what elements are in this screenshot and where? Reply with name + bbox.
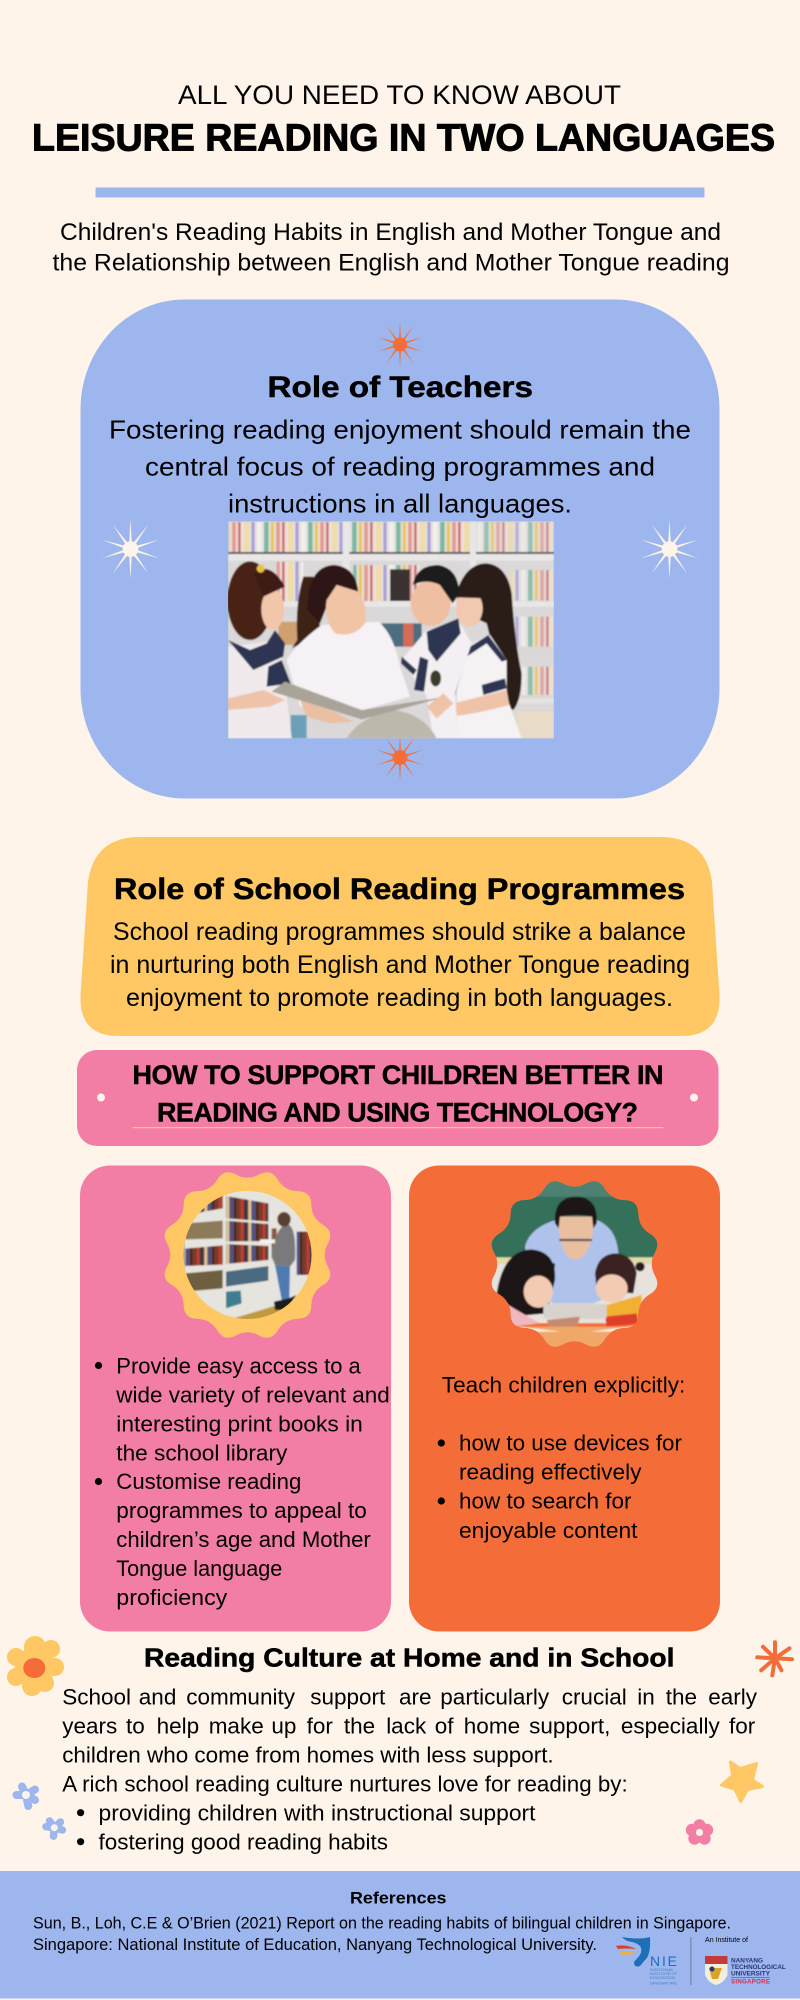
boy body xyxy=(402,623,472,738)
books top row xyxy=(229,522,343,552)
panel: role of teachers xyxy=(80,300,720,798)
reading culture paragraph: children who come from homes with less support. xyxy=(62,1742,554,1768)
title kicker: ALL YOU NEED TO KNOW ABOUT xyxy=(178,80,621,110)
banner dots xyxy=(97,1094,698,1102)
reading culture bullets xyxy=(77,1800,536,1854)
teachers body text: Fostering reading enjoyment should remain the xyxy=(109,414,691,444)
reading culture heading: Reading Culture at Home and in School xyxy=(144,1642,674,1672)
icon: pink flower xyxy=(686,1819,713,1845)
library card bullet list: Customise reading xyxy=(116,1469,301,1494)
books second row xyxy=(277,562,303,602)
reading culture paragraph: of xyxy=(435,1714,454,1738)
section: reading culture at home and in school xyxy=(62,1642,758,1854)
person browsing xyxy=(272,1224,295,1267)
logo: NIE: EDUCATION xyxy=(650,1976,675,1980)
banner: how to support children xyxy=(77,1050,718,1146)
teacher skirt xyxy=(347,710,437,738)
photo: library bookshelves xyxy=(182,1190,313,1321)
reading culture paragraph: in xyxy=(637,1684,655,1710)
footer band xyxy=(0,1871,800,1998)
teachers body text: instructions in all languages. xyxy=(228,488,572,518)
logo: NTU: UNIVERSITY xyxy=(731,1971,771,1978)
logo: NTU: An Institute of xyxy=(705,1937,748,1944)
right girl face xyxy=(456,590,483,627)
icon: yellow star xyxy=(722,1762,762,1802)
reading culture paragraph: School xyxy=(62,1684,131,1710)
school programmes body text: enjoyment to promote reading in both languages. xyxy=(126,984,673,1012)
logo: NTU: NANYANG xyxy=(731,1957,763,1964)
reading culture paragraph: lack xyxy=(386,1714,427,1738)
reading culture paragraph: make xyxy=(209,1714,264,1738)
logo: NTU: SINGAPORE xyxy=(731,1978,770,1986)
main title: LEISURE READING IN TWO LANGUAGES xyxy=(32,118,775,160)
icon: white burst left xyxy=(102,519,159,579)
school programmes panel background xyxy=(80,837,720,1036)
logo: NIE: NIE xyxy=(650,1953,677,1969)
subtitle xyxy=(52,219,730,276)
banner: how to support children: READING AND USING TECHNOLOGY? xyxy=(157,1098,638,1128)
references citation: Singapore: National Institute of Education, Nanyang Technological University. xyxy=(33,1936,597,1954)
logo: NIE: SINGAPORE xyxy=(650,1982,678,1986)
icon: blue flower large xyxy=(16,1786,35,1806)
library card bullet list: Provide easy access to a xyxy=(116,1354,362,1378)
left column books xyxy=(199,1196,224,1214)
technology card text: enjoyable content xyxy=(459,1518,638,1543)
school programmes body text: School reading programmes should strike a balance xyxy=(113,918,686,946)
library card bullet list: programmes to appeal to xyxy=(116,1498,367,1523)
reading culture bullets: providing children with instructional support xyxy=(98,1800,536,1826)
photo: teacher with two girls and tablet xyxy=(488,1177,662,1350)
book xyxy=(272,682,447,719)
reading culture paragraph: support, xyxy=(529,1714,610,1738)
icon: orange burst top xyxy=(378,321,422,368)
panel: technology card xyxy=(409,1166,720,1632)
icon: orange burst bottom xyxy=(377,733,423,782)
library card bullet list: the school library xyxy=(116,1440,287,1466)
teacher ponytail xyxy=(292,577,320,648)
teachers panel background xyxy=(80,300,720,798)
technology card text: how to search for xyxy=(459,1488,632,1514)
icon: blue flower small xyxy=(46,1821,62,1836)
library card bullet list: interesting print books in xyxy=(116,1412,363,1436)
library card background xyxy=(80,1166,391,1632)
reading culture paragraph: the xyxy=(666,1684,697,1710)
teachers body text: central focus of reading programmes and xyxy=(145,452,655,482)
left girl hair xyxy=(228,560,268,641)
footer: references xyxy=(0,1871,800,1998)
left girl face xyxy=(261,589,284,630)
references citation xyxy=(33,1914,731,1954)
technology card text: reading effectively xyxy=(459,1460,642,1484)
reading culture paragraph: support xyxy=(310,1684,386,1710)
photo: teacher reading with children in library xyxy=(227,521,554,739)
library card bullet list: Tongue language xyxy=(116,1556,282,1581)
tablet xyxy=(543,1304,607,1319)
references citation: Sun, B., Loh, C.E & O’Brien (2021) Report on the reading habits of bilingual children in Singapore. xyxy=(33,1914,731,1932)
middle column books xyxy=(226,1196,268,1222)
technology card text: how to use devices for xyxy=(459,1430,682,1456)
logo: NIE xyxy=(616,1937,678,1986)
reading culture paragraph: up xyxy=(271,1714,296,1738)
right girl body xyxy=(457,635,522,738)
reading culture paragraph: help xyxy=(157,1714,199,1738)
icon: white burst right xyxy=(641,519,698,579)
title divider bar xyxy=(96,188,704,198)
reading culture paragraph: especially xyxy=(621,1714,720,1738)
left girl xyxy=(497,1249,555,1317)
library card bullet list: children’s age and Mother xyxy=(116,1527,371,1552)
library card bullet list xyxy=(95,1354,390,1610)
teachers heading: Role of Teachers xyxy=(268,371,533,404)
reading culture paragraph: to xyxy=(126,1714,145,1738)
books third row xyxy=(278,622,298,645)
reading culture paragraph: A rich school reading culture nurtures love for reading by: xyxy=(62,1772,628,1796)
right girl hair xyxy=(457,563,522,710)
right column books xyxy=(272,1228,277,1258)
icon: yellow scalloped frame xyxy=(165,1172,330,1338)
reading culture paragraph: for xyxy=(307,1714,333,1738)
logo divider xyxy=(690,1937,691,1985)
references heading: References xyxy=(350,1888,446,1908)
school programmes heading: Role of School Reading Programmes xyxy=(114,873,685,906)
logo: NIE: INSTITUTE OF xyxy=(650,1972,678,1976)
subtitle: Children's Reading Habits in English and Mother Tongue and xyxy=(60,219,721,246)
reading culture paragraph: community xyxy=(186,1684,296,1710)
reading culture paragraph xyxy=(62,1684,758,1796)
banner heading: HOW TO SUPPORT CHILDREN BETTER IN xyxy=(132,1060,664,1090)
reading culture bullets: fostering good reading habits xyxy=(98,1830,388,1854)
logo: NIE: NATIONAL xyxy=(650,1968,674,1972)
technology card text xyxy=(438,1372,685,1543)
library card bullet list: proficiency xyxy=(116,1585,227,1610)
reading culture paragraph: for xyxy=(729,1714,756,1738)
reading culture paragraph: years xyxy=(62,1714,117,1738)
reading culture paragraph: home xyxy=(464,1714,520,1738)
reading culture paragraph: are xyxy=(399,1684,432,1710)
library card bullet list: wide variety of relevant and xyxy=(115,1382,390,1408)
left girl body xyxy=(228,640,292,738)
desk xyxy=(517,1326,627,1347)
reading culture paragraph: particularly xyxy=(440,1684,550,1710)
technology card background xyxy=(409,1166,720,1632)
panel: school library card xyxy=(80,1166,391,1632)
reading culture paragraph: early xyxy=(708,1684,758,1710)
logo: NTU xyxy=(705,1937,786,1986)
right girl xyxy=(595,1253,637,1293)
school programmes body text xyxy=(110,918,690,1012)
teachers body text xyxy=(109,414,691,518)
title block xyxy=(32,80,775,160)
reading culture paragraph: the xyxy=(344,1714,375,1738)
technology card text: Teach children explicitly: xyxy=(442,1372,685,1398)
panel: role of school reading programmes xyxy=(80,837,720,1036)
banner background xyxy=(77,1050,718,1146)
teacher face xyxy=(326,585,366,635)
icon: orange asterisk xyxy=(757,1642,792,1675)
man torso xyxy=(525,1219,618,1303)
subtitle: the Relationship between English and Mother Tongue reading xyxy=(52,250,730,276)
logo: NTU: TECHNOLOGICAL xyxy=(731,1964,786,1971)
man head xyxy=(558,1217,594,1260)
icon: yellow flower xyxy=(7,1636,64,1696)
school programmes body text: in nurturing both English and Mother Tongue reading xyxy=(110,951,690,979)
reading culture paragraph: crucial xyxy=(562,1684,627,1710)
teacher body xyxy=(287,622,410,710)
reading culture paragraph: and xyxy=(139,1684,176,1710)
teacher hair xyxy=(307,565,358,623)
boy head xyxy=(411,581,451,626)
